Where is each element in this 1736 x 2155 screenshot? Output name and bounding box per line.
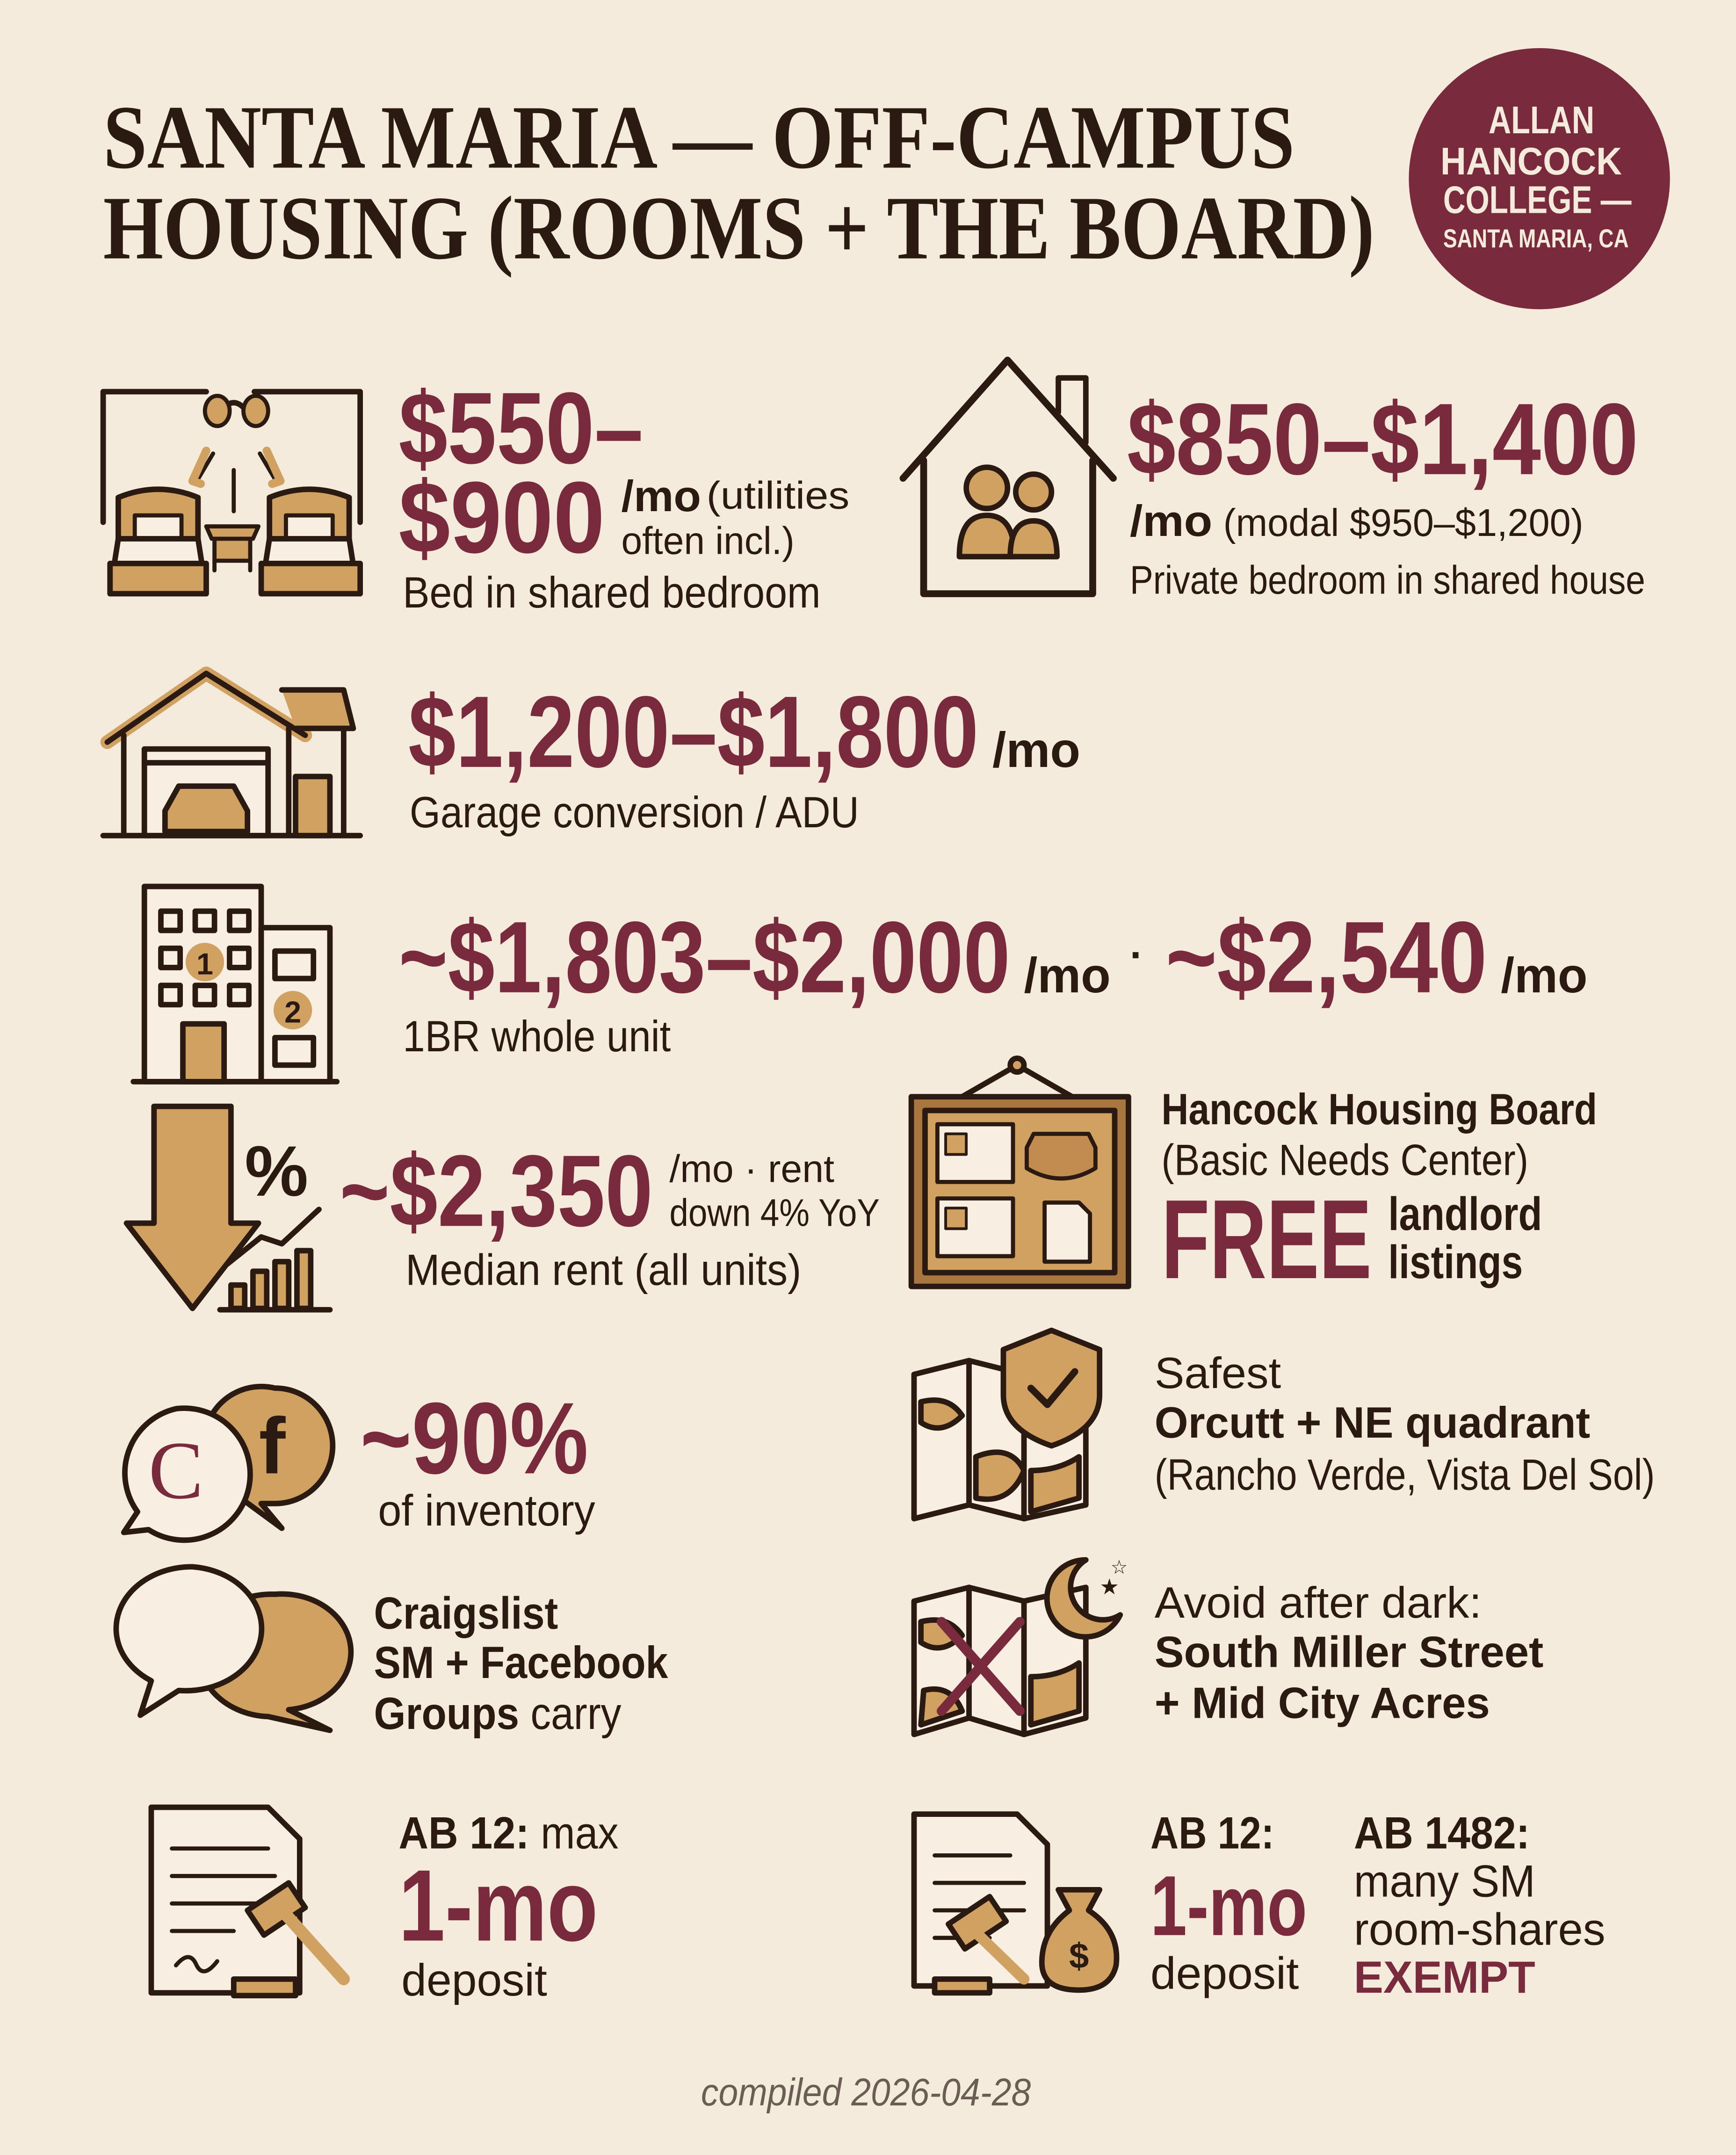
text: AB 12 max deposit: deposit (401, 1954, 547, 2005)
icon: apartment building: 1 (196, 947, 213, 981)
text: AB 12 max deposit: 1-mo (398, 1849, 598, 1963)
text: 1BR whole unit: ~$2,540 (1165, 901, 1487, 1014)
text: median rent (340, 1134, 880, 1294)
icon: Craigslist + Facebook bubbles (124, 1387, 333, 1540)
text: Hancock housing board: (Basic Needs Center) (1161, 1135, 1528, 1185)
text: avoid after dark: + Mid City Acres (1155, 1678, 1490, 1727)
text: Hancock housing board: FREE (1161, 1177, 1372, 1302)
icon: lease with gavel and money bag: $ (1069, 1936, 1089, 1976)
icon: lease with gavel and money bag (914, 1814, 1116, 1993)
text: Hancock housing board: landlord (1388, 1188, 1542, 1240)
text: Craigslist Facebook carry (374, 1587, 668, 1739)
text: Hancock housing board: listings (1388, 1237, 1523, 1288)
text: AB 1482 exempt: AB 1482: (1354, 1808, 1530, 1859)
text: Hancock housing board: Hancock Housing Board (1161, 1085, 1597, 1134)
text: AB 12 1-mo deposit: 1-mo (1150, 1858, 1307, 1953)
text: AB 12 1-mo deposit: AB 12: (1150, 1808, 1274, 1859)
text: 1BR whole unit (398, 901, 1587, 1061)
text: AB 12 max deposit: AB 12: max (398, 1808, 619, 1859)
icon: apartment building (133, 887, 337, 1082)
title: SANTA MARIA — OFF-CAMPUS (103, 87, 1295, 188)
text: 1BR whole unit: /mo (1501, 948, 1587, 1003)
text: private bedroom (1127, 383, 1645, 603)
text: 90% of inventory: of inventory (378, 1486, 595, 1535)
text: bed in shared bedroom (398, 371, 849, 617)
text: AB 1482 exempt (1354, 1808, 1606, 2003)
text: bed in shared bedroom: Bed in shared bedroom (403, 568, 821, 617)
text: 90% of inventory: ~90% (360, 1381, 588, 1495)
text: bed in shared bedroom: $550– (398, 371, 644, 485)
text: 1BR whole unit: /mo (1024, 948, 1111, 1003)
text: avoid after dark (1155, 1578, 1543, 1727)
text: AB 1482 exempt: room-shares (1354, 1903, 1606, 1954)
text: Craigslist Facebook carry: Craigslist (374, 1587, 558, 1638)
icon: map with X and moon: ★ (1099, 1574, 1119, 1599)
text: garage conversion: $1,200–$1,800 (408, 675, 979, 789)
text: safest neighborhoods: (Rancho Verde, Vista Del Sol) (1155, 1450, 1655, 1499)
text: garage conversion: /mo (992, 723, 1080, 778)
footer: compiled date: compiled 2026-04-28 (701, 2071, 1031, 2114)
text: safest neighborhoods: Orcutt + NE quadrant (1155, 1398, 1590, 1447)
text: bed in shared bedroom: often incl.) (621, 520, 795, 562)
text: median rent: Median rent (all units) (405, 1245, 801, 1294)
text: median rent: down 4% YoY (669, 1192, 880, 1234)
text: AB 1482 exempt: EXEMPT (1354, 1952, 1535, 2003)
icon: map with X and moon: ☆ (1111, 1556, 1128, 1578)
badge: Allan Hancock College: ALLAN (1489, 99, 1594, 142)
badge: Allan Hancock College: COLLEGE — (1443, 179, 1632, 222)
text: 1BR whole unit: ~$1,803–$2,000 (398, 901, 1010, 1014)
text: private bedroom: /mo (1130, 496, 1212, 545)
icon: rent down arrow: % (245, 1132, 308, 1211)
text: Hancock housing board (1161, 1085, 1597, 1302)
text: private bedroom: (modal $950–$1,200) (1223, 502, 1584, 544)
text: Craigslist Facebook carry: SM + Facebook (374, 1637, 668, 1688)
icon: Craigslist + Facebook bubbles: C (149, 1425, 203, 1516)
text: 90% of inventory (360, 1381, 595, 1535)
text: avoid after dark: South Miller Street (1155, 1627, 1543, 1677)
text: 1BR whole unit: 1BR whole unit (403, 1012, 671, 1061)
badge: Allan Hancock College: HANCOCK (1440, 140, 1622, 183)
text: AB 12 1-mo deposit: deposit (1150, 1947, 1299, 1998)
icon: housing corkboard (911, 1058, 1128, 1287)
text: 1BR whole unit: · (1130, 932, 1143, 978)
text: safest neighborhoods: Safest (1155, 1348, 1281, 1397)
icon: rent down arrow (127, 1106, 330, 1310)
badge: Allan Hancock College: SANTA MARIA, CA (1443, 224, 1629, 253)
title (103, 87, 1374, 278)
text: avoid after dark: Avoid after dark: (1155, 1578, 1482, 1627)
text: median rent: ~$2,350 (340, 1134, 653, 1248)
text: garage conversion: Garage conversion / ADU (410, 788, 859, 837)
icon: lease with gavel (151, 1807, 344, 1996)
text: AB 1482 exempt: many SM (1354, 1856, 1535, 1907)
text: AB 12 1-mo deposit (1150, 1808, 1307, 1998)
icon: Craigslist + Facebook bubbles: f (259, 1402, 286, 1490)
icon: garage ADU (103, 673, 360, 836)
text: Craigslist Facebook carry: Groups carry (374, 1688, 622, 1739)
icon: house with people (903, 360, 1114, 594)
title: HOUSING (ROOMS + THE BOARD) (103, 177, 1374, 278)
icon: map with X and moon (914, 1556, 1128, 1735)
text: private bedroom: $850–$1,400 (1127, 383, 1638, 496)
text: private bedroom: Private bedroom in shared house (1130, 558, 1645, 603)
text: bed in shared bedroom: $900 (398, 461, 605, 574)
text: AB 12 max deposit (398, 1808, 619, 2005)
badge: Allan Hancock College (1409, 48, 1670, 309)
text: garage conversion (408, 675, 1080, 837)
icon: apartment building: 2 (284, 995, 301, 1029)
text: median rent: /mo · rent (669, 1148, 834, 1190)
icon: speech bubbles (116, 1567, 351, 1730)
text: safest neighborhoods (1155, 1348, 1655, 1499)
text: bed in shared bedroom: /mo (621, 471, 701, 521)
icon: shared bedroom (103, 392, 360, 594)
icon: map with shield (914, 1331, 1099, 1519)
text: bed in shared bedroom: (utilities (707, 474, 849, 517)
